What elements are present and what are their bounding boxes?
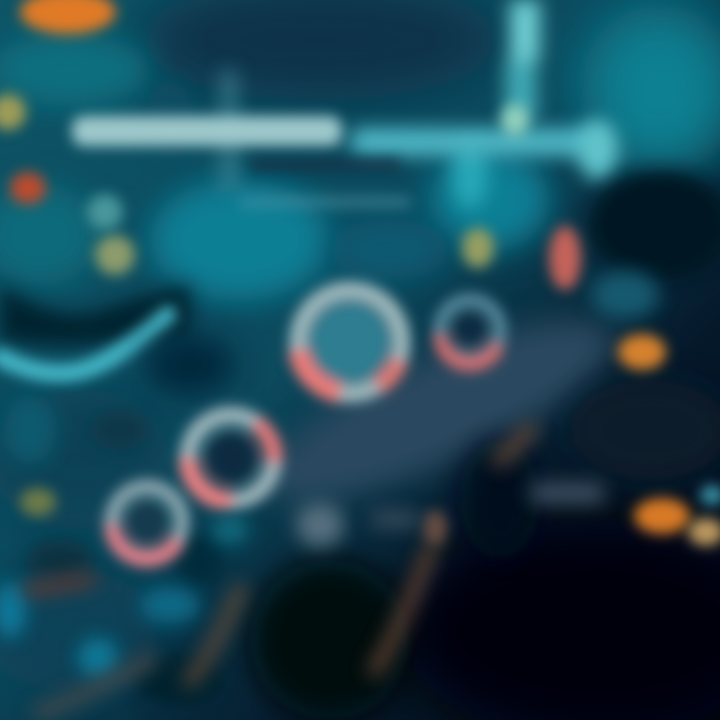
heading bar [72,104,618,180]
wave chart: dark band and cyan line [0,285,235,395]
mottled teal patches [4,80,488,706]
donut chart: large centre [298,290,402,394]
donut chart: right [440,300,500,364]
orange and yellow accent blobs [0,0,720,547]
vertical light beam [220,0,540,190]
subheading bar [240,158,410,208]
donut chart: middle [188,415,274,501]
dark shape: upper right [588,170,720,319]
donut chart: small left [112,487,182,559]
grey data bars lower right [370,482,605,528]
diagonal amber streaks lower centre [30,430,530,712]
small teal blobs lower left [0,516,248,678]
